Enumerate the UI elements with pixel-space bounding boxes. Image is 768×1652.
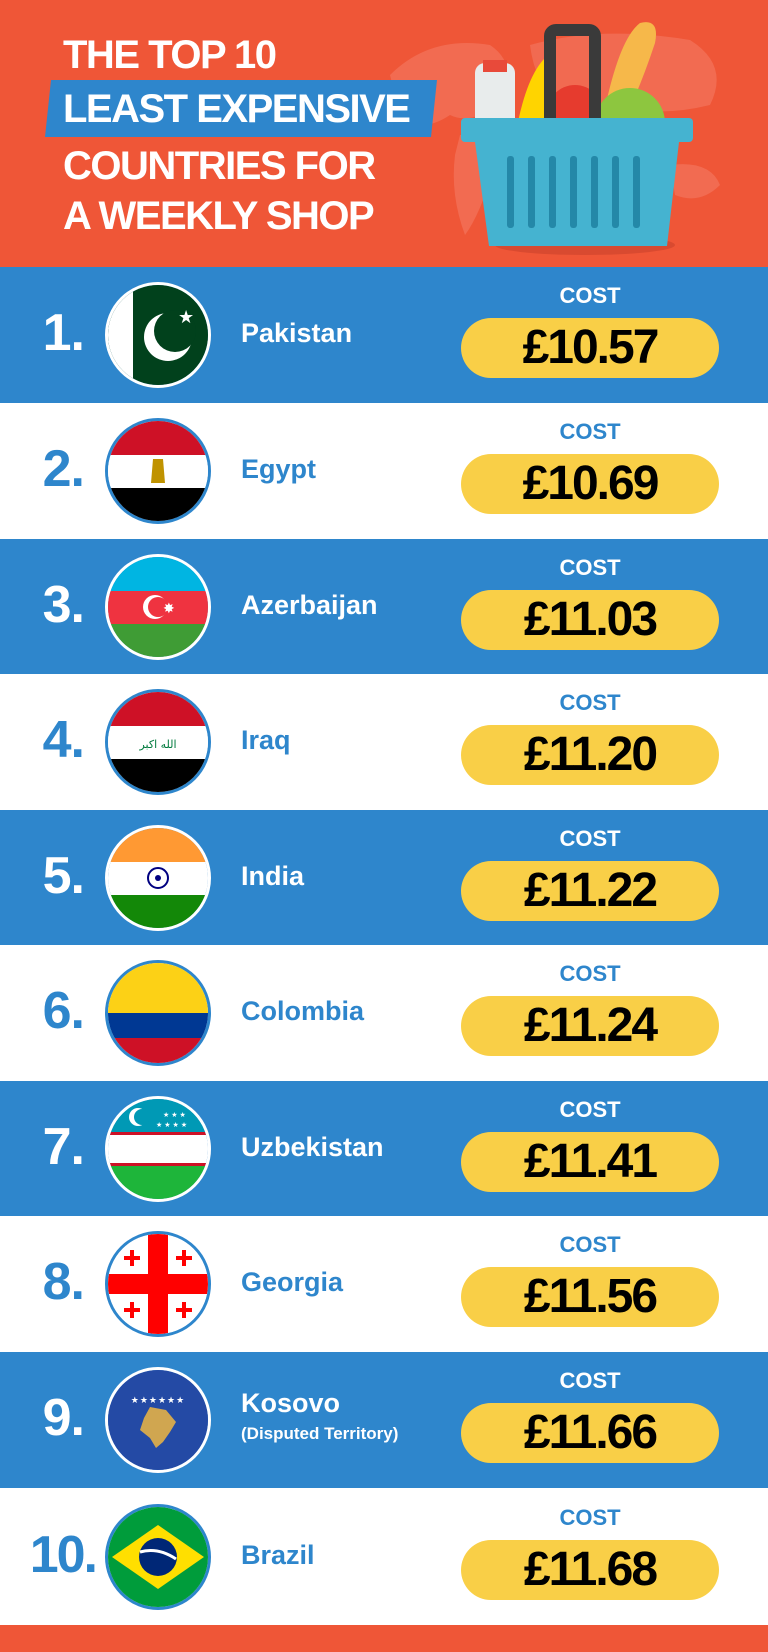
row 9: Kosovo (0, 1352, 768, 1488)
row 5: India: £11.22 (524, 864, 656, 917)
row 6: Colombia: COST (559, 961, 621, 986)
title highlight banner (45, 80, 437, 137)
header panel (0, 0, 768, 267)
row 7: Uzbekistan: Uzbekistan (241, 1132, 384, 1162)
row 7: Uzbekistan: 7. (43, 1118, 84, 1176)
row 6: Colombia: Colombia (241, 996, 364, 1026)
flag: India (105, 825, 211, 931)
row 5: India: COST (559, 826, 621, 851)
row 2: Egypt: Egypt (241, 454, 316, 484)
row 7: Uzbekistan: £11.41 (524, 1135, 656, 1188)
flag: Brazil (105, 1504, 211, 1610)
row 5: India (0, 810, 768, 946)
row 2: Egypt: 2. (43, 440, 84, 498)
row 2: Egypt (0, 403, 768, 539)
title line 1: THE TOP 10 (63, 33, 276, 77)
flag: Azerbaijan: ✸ (163, 600, 175, 616)
flag: Uzbekistan: ★★★ (163, 1111, 188, 1119)
row 8: Georgia (0, 1216, 768, 1352)
row 1: Pakistan: 1. (43, 304, 84, 362)
row 4: Iraq (0, 674, 768, 810)
row 1: Pakistan: Pakistan (241, 318, 352, 348)
flag: Georgia (105, 1231, 211, 1337)
title line 2: LEAST EXPENSIVE (63, 87, 409, 131)
row 3: Azerbaijan: 3. (43, 576, 84, 634)
row 3: Azerbaijan: £11.03 (524, 593, 656, 646)
flag: Kosovo (105, 1367, 211, 1473)
row 7: Uzbekistan (0, 1081, 768, 1217)
flag: Colombia (105, 960, 211, 1066)
row 9: Kosovo: 9. (43, 1389, 84, 1447)
flag: Iraq: الله اكبر (138, 738, 177, 751)
row 8: Georgia: £11.56 (524, 1270, 656, 1323)
row 6: Colombia: £11.24 (524, 999, 656, 1052)
row 8: Georgia: COST (559, 1232, 621, 1257)
icon: shopping basket (461, 22, 693, 255)
row 10: Brazil: Brazil (241, 1540, 315, 1570)
row 8: Georgia: Georgia (241, 1267, 343, 1297)
row 8: Georgia: 8. (43, 1253, 84, 1311)
row 6: Colombia (0, 945, 768, 1081)
row 10: Brazil: £11.68 (524, 1543, 656, 1596)
row 6: Colombia: 6. (43, 982, 84, 1040)
row 1: Pakistan (0, 267, 768, 403)
footer bar (0, 1625, 768, 1652)
world map decoration (390, 34, 720, 234)
row 9: Kosovo: COST (559, 1368, 621, 1393)
row 1: Pakistan: COST (559, 283, 621, 308)
row 10: Brazil: 10. (30, 1526, 96, 1584)
row 3: Azerbaijan: Azerbaijan (241, 590, 378, 620)
flag: Pakistan (105, 282, 211, 388)
row 1: Pakistan: £10.57 (523, 321, 657, 374)
row 5: India: 5. (43, 847, 84, 905)
row 7: Uzbekistan: COST (559, 1097, 621, 1122)
flag: Iraq (105, 689, 211, 795)
flag: Kosovo: ★★★★★★ (131, 1395, 185, 1405)
flag: Azerbaijan (105, 554, 211, 660)
flag: Uzbekistan: ★★★★ (156, 1121, 189, 1129)
flag: Pakistan: ★ (178, 307, 194, 327)
flag: Uzbekistan (105, 1096, 211, 1202)
title line 3: COUNTRIES FOR (63, 144, 375, 188)
row 3: Azerbaijan: COST (559, 555, 621, 580)
row 10: Brazil: COST (559, 1505, 621, 1530)
row 2: Egypt: COST (559, 419, 621, 444)
row 2: Egypt: £10.69 (523, 457, 657, 510)
row 9: Kosovo: Kosovo (241, 1388, 340, 1418)
subtitle: (Disputed Territory) (241, 1424, 398, 1443)
row 4: Iraq: 4. (43, 711, 84, 769)
row 4: Iraq: £11.20 (524, 728, 656, 781)
row 4: Iraq: Iraq (241, 725, 291, 755)
row 10: Brazil (0, 1489, 768, 1625)
row 4: Iraq: COST (559, 690, 621, 715)
row 9: Kosovo: £11.66 (524, 1406, 656, 1459)
row 3: Azerbaijan (0, 539, 768, 675)
flag: Egypt (105, 418, 211, 524)
row 5: India: India (241, 861, 304, 891)
title line 4: A WEEKLY SHOP (63, 194, 373, 238)
